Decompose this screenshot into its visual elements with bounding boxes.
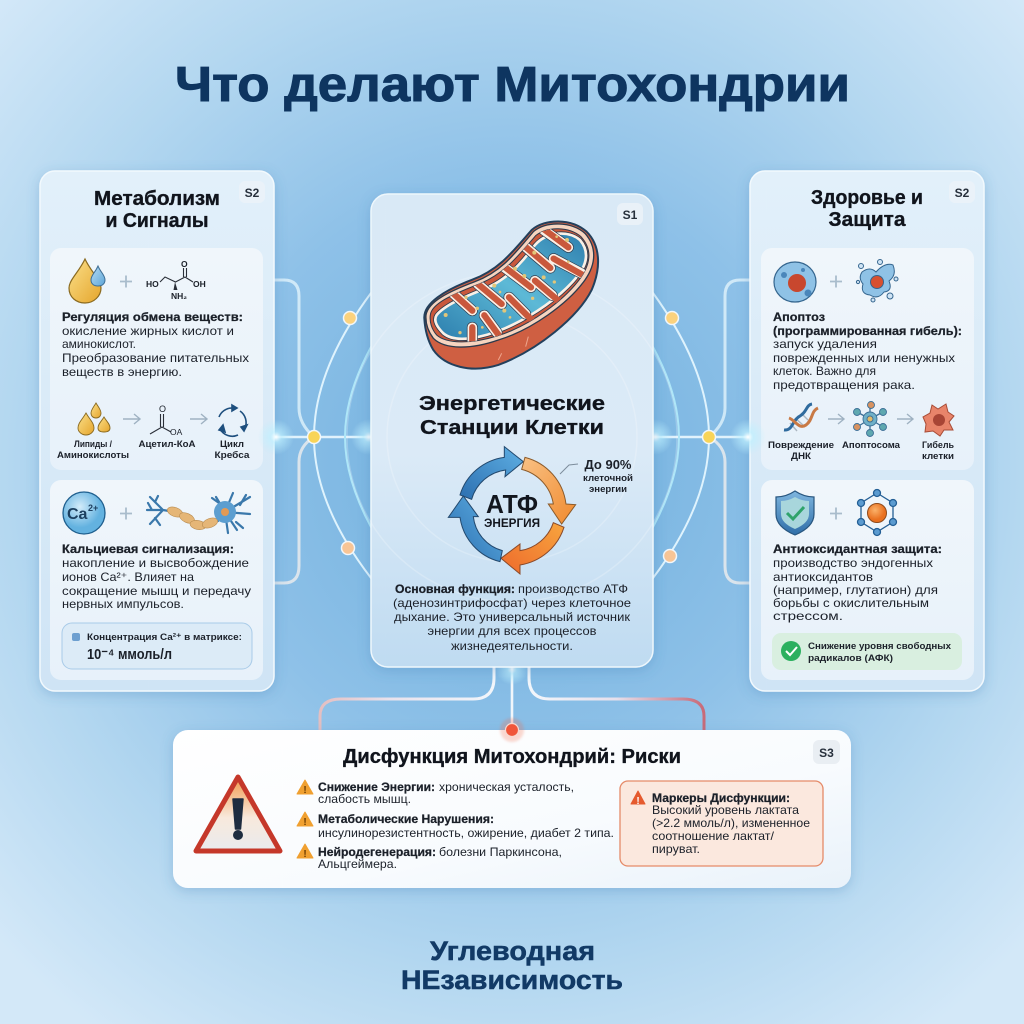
labels: apoptosis flow	[768, 440, 954, 462]
icon: krebs cycle	[219, 405, 247, 436]
risk: metabolic disorders: Метаболические Нарушения:	[318, 812, 494, 826]
icon: mitochondrion	[424, 221, 598, 369]
icon: plus	[120, 276, 132, 288]
heading: metabolism: Метаболизм	[94, 188, 220, 210]
callout: free radical reduction	[772, 633, 962, 670]
text: antioxidant defense: (например, глутатион) для	[773, 583, 938, 597]
risk: energy decline: !	[303, 785, 307, 796]
risk: metabolic disorders: !	[303, 817, 307, 828]
text: apoptosis: (программированная гибель):	[773, 324, 962, 338]
panel: mitochondrial dysfunction risks	[173, 730, 851, 888]
icon: amino acid molecule: NH₂	[171, 291, 187, 301]
heading: energy stations	[419, 393, 605, 439]
title: Что делают Митохондрии	[175, 58, 850, 112]
icon: acetyl molecule: O	[159, 404, 166, 414]
arrow: apoptosome to cell death	[897, 414, 913, 424]
risk: energy decline	[297, 780, 574, 806]
icon: amino acid molecule: OH	[193, 279, 206, 289]
risk: energy decline: Снижение Энергии:	[318, 780, 435, 794]
icon: cell	[774, 262, 816, 302]
badge S2 left	[239, 181, 265, 203]
text: antioxidant defense	[773, 542, 942, 623]
icon: calcium ion: 2+	[88, 503, 98, 513]
text: calcium signaling	[62, 542, 251, 611]
footer brand: Углеводная	[430, 936, 595, 966]
labels: apoptosis flow: Гибель	[922, 440, 954, 451]
text: apoptosis: поврежденных или ненужных	[773, 351, 955, 365]
callout: dysfunction markers	[620, 781, 823, 866]
risk: neurodegeneration: Нейродегенерация:	[318, 845, 436, 859]
text: metabolism regulation: Преобразование питательных	[62, 351, 249, 365]
risk: energy decline: хроническая усталость,	[439, 780, 574, 794]
callout: dysfunction markers: Высокий уровень лактата	[652, 803, 799, 817]
icon: antioxidant molecule	[858, 490, 896, 536]
callout: free radical reduction: Снижение уровня свободных	[808, 641, 952, 652]
panel: metabolism and signals	[40, 171, 274, 691]
heading: health: Защита	[828, 209, 906, 231]
risk: neurodegeneration: болезни Паркинсона,	[439, 845, 562, 859]
text: metabolism regulation: Регуляция обмена веществ:	[62, 310, 243, 324]
heading: health: Здоровье и	[811, 187, 923, 209]
text: apoptosis	[773, 310, 962, 392]
glow nodes and connection dots	[258, 312, 766, 685]
callout: dysfunction markers: (>2.2 ммоль/л), измененное	[652, 816, 810, 830]
badge S3: S3	[819, 746, 834, 760]
red alert node	[500, 718, 524, 742]
diagram: ATP cycle: ЭНЕРГИЯ	[484, 516, 540, 530]
callout: dysfunction markers: соотношение лактат/	[652, 829, 775, 843]
text: core function: энергии для всех процессов	[428, 624, 596, 638]
badge S1: S1	[623, 208, 638, 222]
arrow: DNA to apoptosome	[828, 414, 844, 424]
labels: apoptosis flow: Апоптосома	[842, 440, 901, 451]
text: antioxidant defense: стрессом.	[773, 609, 843, 623]
labels: metabolic flow: Цикл	[220, 439, 244, 450]
labels: apoptosis flow: ДНК	[791, 451, 811, 462]
badge S2 left: S2	[245, 186, 260, 200]
labels: metabolic flow: Аминокислоты	[57, 450, 129, 461]
icon: dying cell	[923, 404, 954, 436]
text: core function: Основная функция:	[395, 582, 515, 596]
icon: warning triangle large	[196, 777, 280, 851]
text: calcium signaling: ионов Ca²⁺. Влияет на	[62, 570, 194, 584]
text: calcium signaling: сокращение мышц и передачу	[62, 584, 251, 598]
callout: dysfunction markers: !	[636, 796, 640, 807]
callout: calcium concentration: Концентрация Ca²⁺ в матриксе:	[87, 632, 242, 643]
labels: metabolic flow: Кребса	[214, 450, 250, 461]
heading: metabolism: и Сигналы	[106, 210, 208, 232]
icon: plus	[120, 508, 132, 520]
text: apoptosis: предотвращения рака.	[773, 378, 915, 392]
icon: amino acid molecule	[146, 259, 206, 301]
heading: metabolism	[94, 188, 220, 232]
risk: neurodegeneration	[297, 844, 562, 871]
text: core function: дыхание. Это универсальный источник	[394, 610, 631, 624]
card: metabolism regulation	[50, 248, 263, 470]
text: antioxidant defense: Антиоксидантная защита:	[773, 542, 942, 556]
connector lines	[274, 280, 750, 730]
footer brand	[401, 936, 623, 995]
text: metabolism regulation	[62, 310, 249, 379]
heading: dysfunction: Дисфункция Митохондрий: Риски	[343, 746, 681, 768]
card: apoptosis	[761, 248, 974, 470]
card: antioxidant defense	[761, 480, 974, 680]
badge S2 right	[949, 181, 975, 203]
text: core function	[393, 582, 631, 653]
arrow: acetyl to krebs	[190, 414, 207, 424]
callout: dysfunction markers: пируват.	[652, 842, 700, 856]
icon: plus	[830, 276, 842, 288]
card: calcium signaling	[50, 480, 263, 680]
icon: plus	[830, 508, 842, 520]
text: calcium signaling: Кальциевая сигнализация:	[62, 542, 234, 556]
diagram: ATP cycle	[448, 447, 576, 574]
risk: neurodegeneration: !	[303, 849, 307, 860]
text: metabolism regulation: веществ в энергию.	[62, 365, 182, 379]
diagram: ATP cycle: АТФ	[486, 489, 538, 519]
arrow: lipids to acetyl	[123, 414, 140, 424]
risk: neurodegeneration: Альцгеймера.	[318, 857, 397, 871]
text: antioxidant defense: антиоксидантов	[773, 570, 873, 584]
text: antioxidant defense: борьбы с окислительным	[773, 596, 929, 610]
text: metabolism regulation: аминокислот.	[62, 337, 136, 351]
risk: metabolic disorders	[297, 812, 614, 840]
badge S1	[617, 203, 643, 225]
panel: health and protection	[750, 171, 984, 691]
icon: acetyl molecule: OA	[170, 427, 183, 437]
icon: amino acid molecule: HO	[146, 279, 159, 289]
icon: amino acid molecule: O	[181, 259, 188, 269]
icon: acetyl molecule	[150, 404, 183, 437]
risk: metabolic disorders: инсулинорезистентность, ожирение, диабет 2 типа.	[318, 826, 614, 840]
icon: oil drops	[69, 259, 105, 303]
icon: calcium ion: Ca	[67, 506, 88, 523]
labels: metabolic flow: Ацетил-КоА	[138, 439, 196, 450]
callout: calcium concentration: 10⁻⁴ ммоль/л	[87, 646, 172, 663]
text: core function: жизнедеятельности.	[451, 639, 573, 653]
text: core function: производство АТФ	[518, 582, 628, 596]
callout: 90 percent energy	[560, 457, 633, 495]
heading: energy stations: Энергетические	[419, 393, 605, 415]
text: core function: (аденозинтрифосфат) через клеточное	[393, 596, 631, 610]
labels: metabolic flow: Липиды /	[74, 439, 112, 450]
badge S3	[813, 740, 840, 764]
text: apoptosis: клеток. Важно для	[773, 364, 876, 378]
panel: energy stations central	[347, 194, 677, 667]
text: apoptosis: запуск удаления	[773, 337, 877, 351]
heading: health	[811, 187, 923, 231]
callout: 90 percent energy: энергии	[589, 484, 627, 495]
icon: neuron	[147, 493, 250, 533]
callout: dysfunction markers: Маркеры Дисфункции:	[652, 791, 790, 805]
risk: energy decline: слабость мышц.	[318, 792, 411, 806]
text: metabolism regulation: окисление жирных кислот и	[62, 324, 234, 338]
icon: apoptotic cell	[856, 260, 898, 302]
callout: 90 percent energy: До 90%	[584, 457, 632, 472]
icon: small lipid drops	[78, 403, 110, 435]
heading: energy stations: Станции Клетки	[420, 417, 604, 439]
callout: 90 percent energy: клеточной	[583, 473, 633, 484]
footer brand: НЕзависимость	[401, 965, 623, 995]
labels: apoptosis flow: клетки	[922, 451, 954, 462]
badge S2 right: S2	[955, 186, 970, 200]
icon: calcium ion	[63, 492, 105, 534]
labels: apoptosis flow: Повреждение	[768, 440, 834, 451]
text: calcium signaling: нервных импульсов.	[62, 597, 184, 611]
icon: shield	[776, 491, 814, 535]
callout: free radical reduction: радикалов (АФК)	[808, 653, 893, 664]
labels: metabolic flow	[57, 439, 250, 461]
text: antioxidant defense: производство эндогенных	[773, 556, 933, 570]
text: calcium signaling: накопление и высвобождение	[62, 556, 249, 570]
text: apoptosis: Апоптоз	[773, 310, 825, 324]
icon: damaged DNA	[784, 404, 818, 431]
icon: apoptosome	[854, 402, 886, 436]
callout: calcium concentration	[62, 623, 252, 669]
